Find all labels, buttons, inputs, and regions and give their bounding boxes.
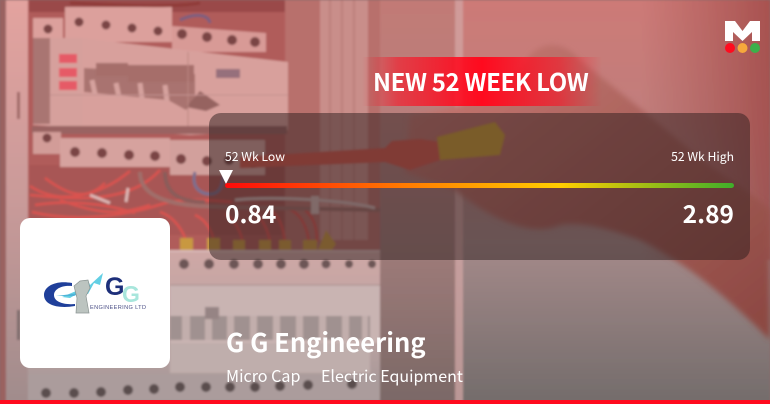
brand logo (725, 21, 760, 53)
banner text: NEW 52 WEEK LOW (373, 63, 588, 98)
banner: new 52 week low (362, 57, 602, 106)
lower terminals (33, 132, 61, 154)
brand mark M (725, 21, 760, 41)
range bar (225, 183, 734, 188)
wires (30, 170, 317, 245)
label: 52 wk high: 52 Wk High (671, 147, 734, 165)
main breaker block (33, 38, 288, 135)
screwdriver (240, 139, 440, 170)
lower breakers (28, 250, 380, 404)
cabinet interior (28, 0, 380, 404)
company logo (44, 273, 146, 314)
value: high: 2.89 (683, 196, 734, 231)
left lower pillar mark (17, 310, 20, 340)
hand and arm (405, 45, 770, 340)
logo card (20, 218, 170, 368)
upper terminals (33, 18, 63, 38)
marker: current price triangle (219, 170, 233, 184)
wood strip (380, 0, 456, 404)
logo: fist (74, 280, 90, 313)
tag: sector: Electric Equipment (321, 363, 463, 387)
bottom red bar (0, 400, 770, 404)
panel: 52 week range (209, 113, 750, 260)
yellow terminals (180, 230, 336, 250)
value: low: 0.84 (225, 196, 276, 231)
left pillar (0, 0, 7, 404)
logo: lightning bolt (62, 273, 103, 298)
tag: market cap: Micro Cap (226, 363, 300, 387)
label: 52 wk low: 52 Wk Low (225, 147, 285, 165)
logo: letters: G (105, 273, 124, 301)
brand dots (725, 43, 760, 53)
company name: G G Engineering (226, 323, 426, 360)
logo: letters (90, 273, 146, 311)
logo: letters: ENGINEERING LTD (90, 305, 146, 311)
logo: swoosh G (44, 282, 75, 307)
logo: letters: G (122, 281, 140, 307)
